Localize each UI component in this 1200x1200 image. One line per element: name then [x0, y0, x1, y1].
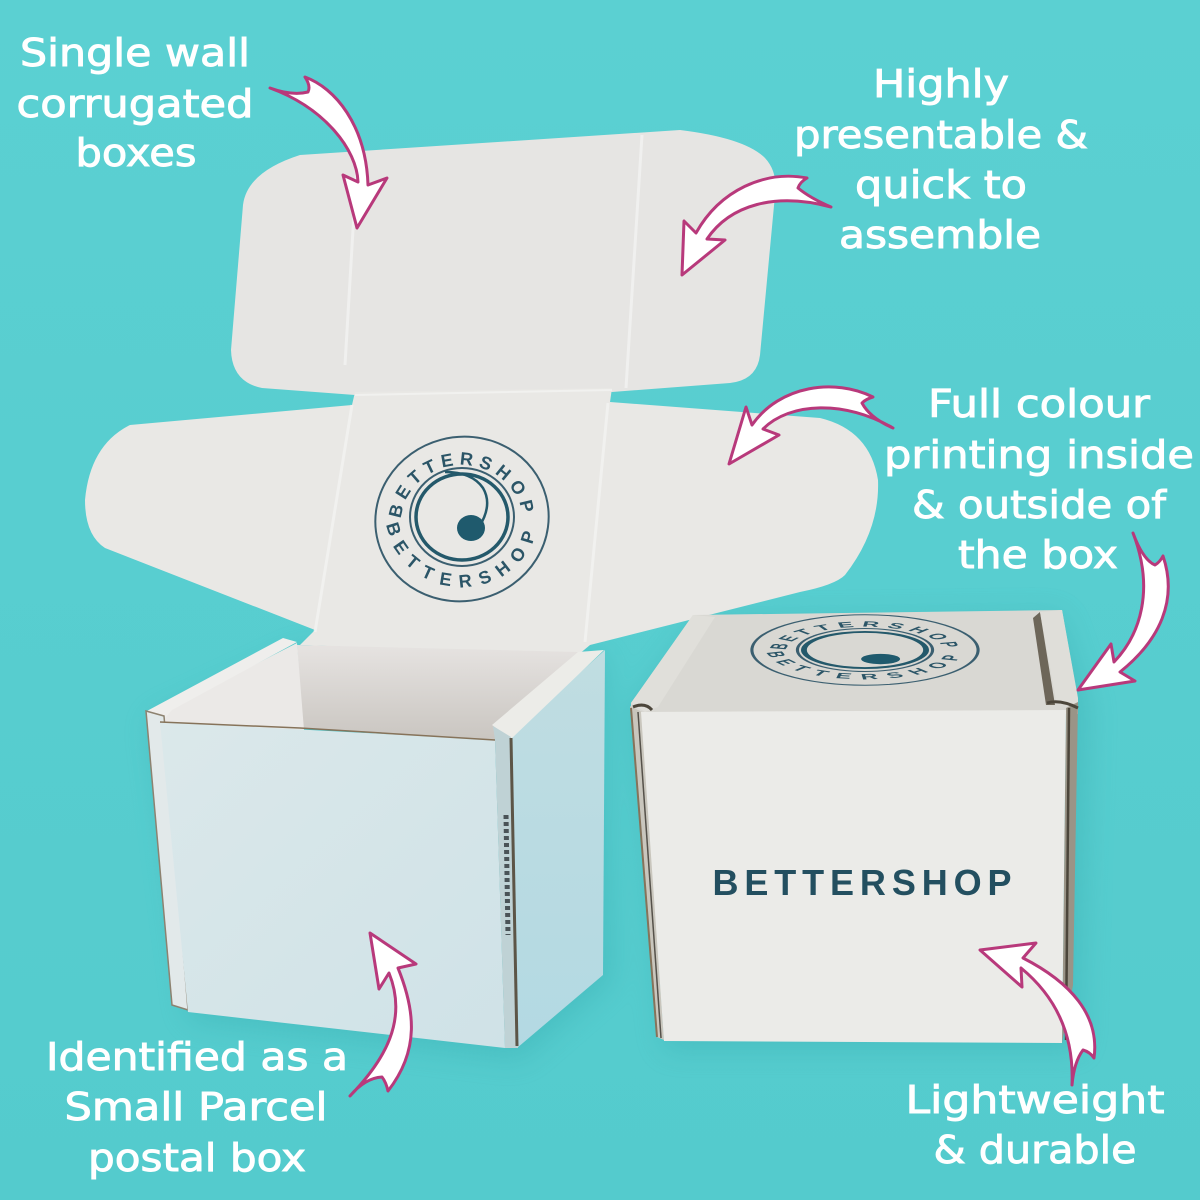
callout: small parcel: postal box: [88, 1136, 306, 1180]
right side edge: [1062, 702, 1078, 1043]
callout: single wall corrugated boxes: boxes: [76, 131, 196, 175]
upper lid flap: [231, 130, 776, 395]
callout: single wall corrugated boxes: [16, 31, 254, 175]
right edge flange: [493, 726, 518, 1048]
callout: single wall corrugated boxes: corrugated: [16, 82, 254, 126]
left box: [145, 638, 605, 1048]
lower lid panel with wings: [85, 388, 878, 655]
callout: highly presentable: presentable &: [794, 113, 1088, 157]
right flange gap: [1033, 612, 1055, 705]
arrow: full colour: [729, 387, 893, 464]
interior back wall: [297, 645, 578, 742]
circular logo on lid: BETTERSHOP: [386, 522, 534, 588]
callout: small parcel: [46, 1035, 348, 1180]
callout: highly presentable: assemble: [839, 213, 1041, 257]
circular logo on lid: BETTERSHOP: [388, 452, 534, 518]
callout: full colour printing: printing inside: [884, 433, 1194, 477]
BETTERSHOP wordmark: BETTERSHOP: [712, 862, 1012, 903]
open box: lid flaps: [85, 130, 878, 654]
barcode strip: [506, 815, 508, 935]
callout: lightweight and durable: & durable: [934, 1128, 1136, 1172]
right box: [630, 610, 1079, 1043]
callout: small parcel: Small Parcel: [64, 1085, 328, 1129]
callout: full colour printing: [884, 382, 1194, 577]
logo on top of box: BETTERSHOP: [770, 621, 958, 650]
callout: highly presentable: [794, 62, 1088, 257]
callout: full colour printing: the box: [958, 533, 1118, 577]
soft shadows behind boxes: [150, 615, 1090, 1060]
callout: lightweight and durable: [906, 1078, 1164, 1172]
callout: lightweight and durable: Lightweight: [906, 1078, 1164, 1122]
left flange: [631, 615, 715, 712]
callout: full colour printing: & outside of: [912, 483, 1168, 527]
flap fold lines: [315, 135, 642, 642]
callout: small parcel: Identified as a: [46, 1035, 348, 1079]
interior left wall: [158, 643, 304, 730]
left top flange: [145, 638, 297, 718]
callout: highly presentable: Highly: [873, 62, 1009, 106]
callout: full colour printing: Full colour: [928, 382, 1150, 426]
right side face: [508, 650, 605, 1048]
callout: highly presentable: quick to: [855, 163, 1027, 207]
circular logo on lid: [374, 436, 550, 602]
right top flange: [492, 650, 604, 739]
left edge flange: [146, 711, 188, 1010]
logo on top of box: [750, 614, 980, 686]
left side edge: [630, 706, 664, 1040]
arrow: small parcel: [350, 933, 416, 1096]
arrow: printing inside and outside: [1078, 533, 1168, 690]
arrow: presentable: [682, 176, 831, 275]
front face: [160, 722, 505, 1048]
arrow: lightweight: [980, 943, 1095, 1085]
arrow: single wall: [270, 77, 387, 228]
right flange: [1040, 610, 1078, 704]
front face: [641, 710, 1066, 1043]
box top face: [631, 610, 1078, 714]
logo on top of box: BETTERSHOP: [766, 651, 958, 680]
callout: single wall corrugated boxes: Single wall: [20, 31, 250, 75]
corner curls: [633, 702, 1078, 710]
